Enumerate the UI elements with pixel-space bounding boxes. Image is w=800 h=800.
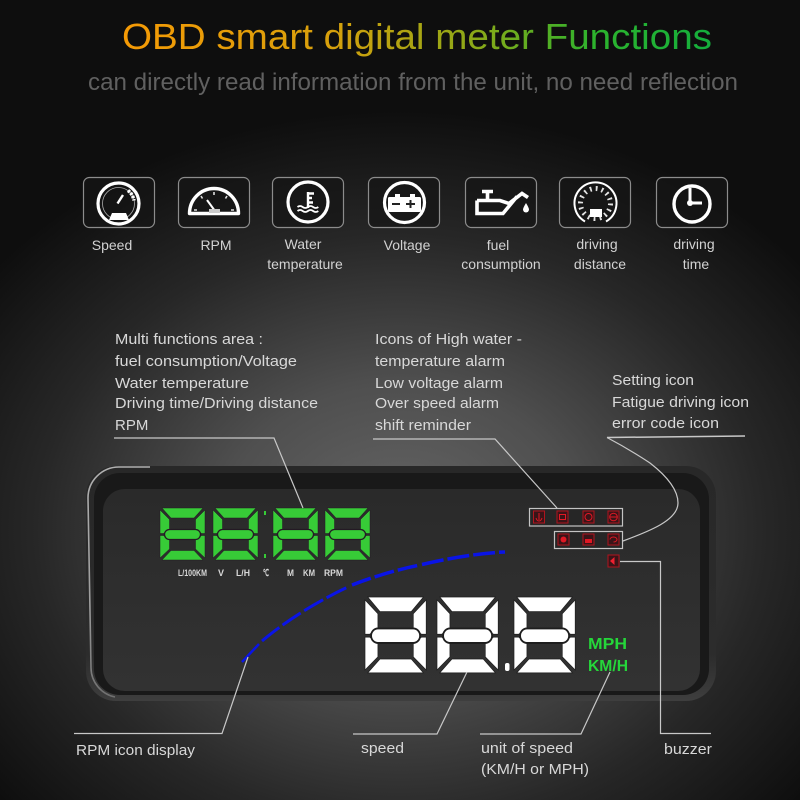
feature: voltage: Voltage bbox=[384, 237, 431, 253]
display: unit labels: L/100KM bbox=[178, 568, 207, 579]
display: unit labels: M bbox=[287, 568, 294, 579]
text: setting icons bbox=[612, 372, 749, 432]
text: alarm icons: Over speed alarm bbox=[375, 395, 499, 412]
feature: RPM: RPM bbox=[200, 237, 232, 253]
device: HUD body bbox=[86, 466, 716, 701]
display: unit labels: V bbox=[218, 568, 225, 579]
label: speed: speed bbox=[361, 740, 404, 757]
text: multi functions area: Driving time/Driving distance bbox=[115, 395, 318, 412]
display: blue RPM arc bbox=[242, 552, 505, 662]
text: alarm icons bbox=[375, 331, 522, 434]
label: buzzer: buzzer bbox=[664, 741, 712, 758]
display: unit labels: L/H bbox=[236, 568, 250, 579]
display: white speed digits bbox=[365, 597, 575, 673]
feature: driving time: driving bbox=[673, 236, 715, 252]
display: speed units: KM/H bbox=[588, 658, 628, 675]
feature: voltage bbox=[368, 178, 440, 253]
text: alarm icons: shift reminder bbox=[375, 417, 471, 434]
feature: water temperature: temperature bbox=[267, 256, 343, 272]
display: speed units bbox=[588, 636, 628, 675]
label: unit of speed: unit of speed bbox=[481, 740, 573, 757]
feature: driving distance: distance bbox=[574, 256, 626, 272]
display: unit labels: RPM bbox=[324, 568, 343, 579]
feature: fuel consumption: fuel bbox=[487, 237, 509, 253]
display: unit labels: ℃ bbox=[263, 568, 269, 579]
label: unit of speed bbox=[481, 740, 589, 778]
text: setting icons: Setting icon bbox=[612, 372, 694, 389]
feature: driving distance bbox=[560, 178, 630, 272]
display: unit labels: KM bbox=[303, 568, 315, 579]
feature: fuel consumption: consumption bbox=[461, 256, 541, 272]
feature: driving time bbox=[656, 178, 728, 272]
feature: driving time: time bbox=[683, 256, 709, 272]
feature: water temperature bbox=[267, 178, 344, 272]
feature: RPM bbox=[178, 178, 250, 253]
text: multi functions area: Water temperature bbox=[115, 375, 249, 392]
text: multi functions area: RPM bbox=[115, 417, 148, 434]
display: speed units: MPH bbox=[588, 636, 627, 653]
text: multi functions area: Multi functions area : bbox=[115, 331, 263, 348]
label: RPM icon display: RPM icon display bbox=[76, 742, 195, 759]
text: alarm icons: Low voltage alarm bbox=[375, 375, 503, 392]
feature: driving distance: driving bbox=[576, 236, 618, 252]
display: green multifunction digits bbox=[160, 508, 370, 560]
text: setting icons: Fatigue driving icon bbox=[612, 394, 749, 411]
text: setting icons: error code icon bbox=[612, 415, 719, 432]
feature: speed: Speed bbox=[92, 237, 132, 253]
label: unit of speed: (KM/H or MPH) bbox=[481, 761, 589, 778]
subtitle: can directly read information from the unit, no need reflection bbox=[88, 69, 738, 96]
feature: fuel consumption bbox=[461, 178, 541, 272]
leader lines bbox=[74, 436, 745, 734]
title: OBD smart digital meter Functions bbox=[122, 16, 712, 57]
display: alarm icon group bbox=[530, 508, 622, 567]
feature: water temperature: Water bbox=[285, 236, 322, 252]
display: unit labels bbox=[178, 568, 343, 579]
text: multi functions area: fuel consumption/Voltage bbox=[115, 353, 297, 370]
text: alarm icons: temperature alarm bbox=[375, 353, 505, 370]
feature: speed bbox=[84, 178, 154, 253]
text: alarm icons: Icons of High water - bbox=[375, 331, 522, 348]
text: multi functions area bbox=[115, 331, 318, 434]
